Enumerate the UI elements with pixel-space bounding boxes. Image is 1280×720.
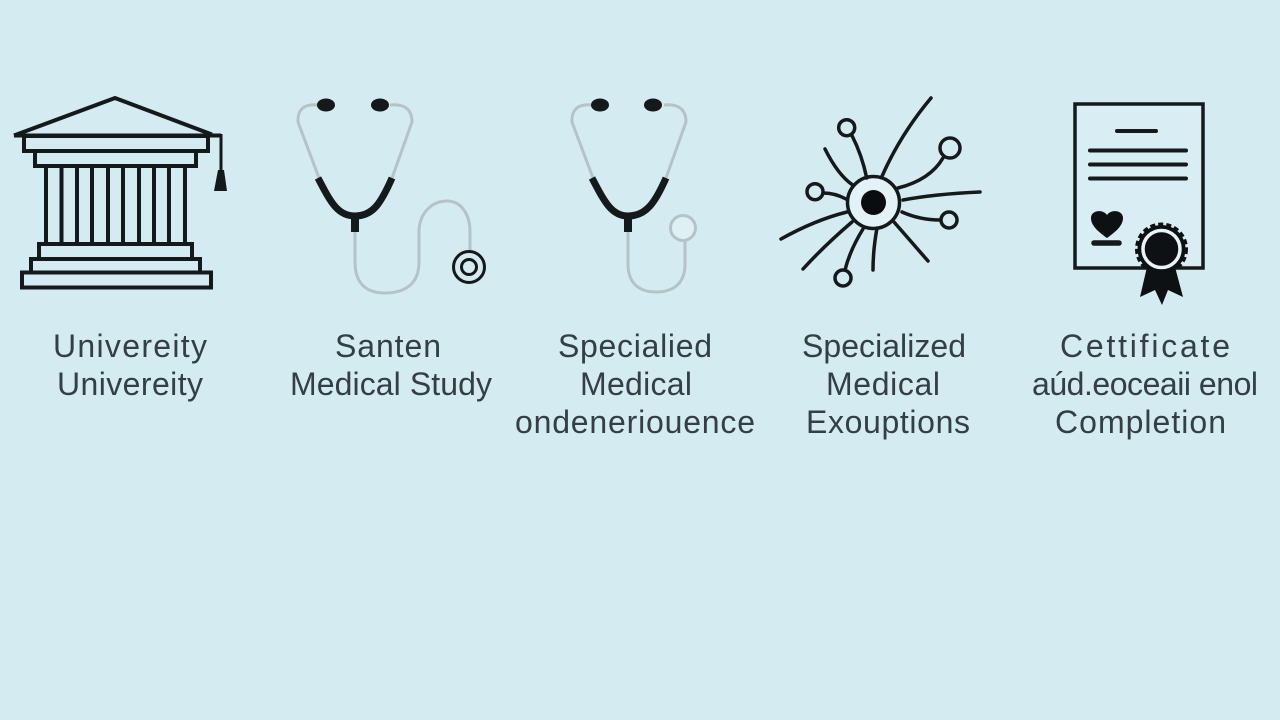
label: certificate of completion: Completion [1055, 404, 1226, 440]
icon: stethoscope with long tube [298, 98, 484, 293]
label: certificate of completion [1032, 328, 1258, 440]
label: specialized medical experience: Medical [580, 366, 692, 402]
label: certificate of completion: Cettificate [1060, 328, 1230, 364]
icon: neuron network [781, 98, 980, 286]
label: specialized medical experience: ondeneriouence [515, 404, 755, 440]
label: certificate of completion: aúd.eoceaii enol [1032, 366, 1258, 402]
label: university [53, 328, 207, 402]
icon: stethoscope with short tube [572, 98, 696, 292]
label: medical study: Santen [335, 328, 441, 364]
label: university: Univereity [57, 366, 203, 402]
label: specialized medical exams: Exouptions [806, 404, 970, 440]
label: medical study: Medical Study [290, 366, 492, 402]
label: medical study [290, 328, 492, 402]
label: specialized medical exams: Medical [826, 366, 940, 402]
label: specialized medical experience [515, 328, 755, 440]
label: university: Univereity [53, 328, 207, 364]
label: specialized medical exams [802, 328, 970, 440]
icon: certificate with seal [1075, 104, 1203, 305]
label: specialized medical exams: Specialized [802, 328, 966, 364]
icon: university building [14, 98, 227, 288]
label: specialized medical experience: Specialied [558, 328, 712, 364]
